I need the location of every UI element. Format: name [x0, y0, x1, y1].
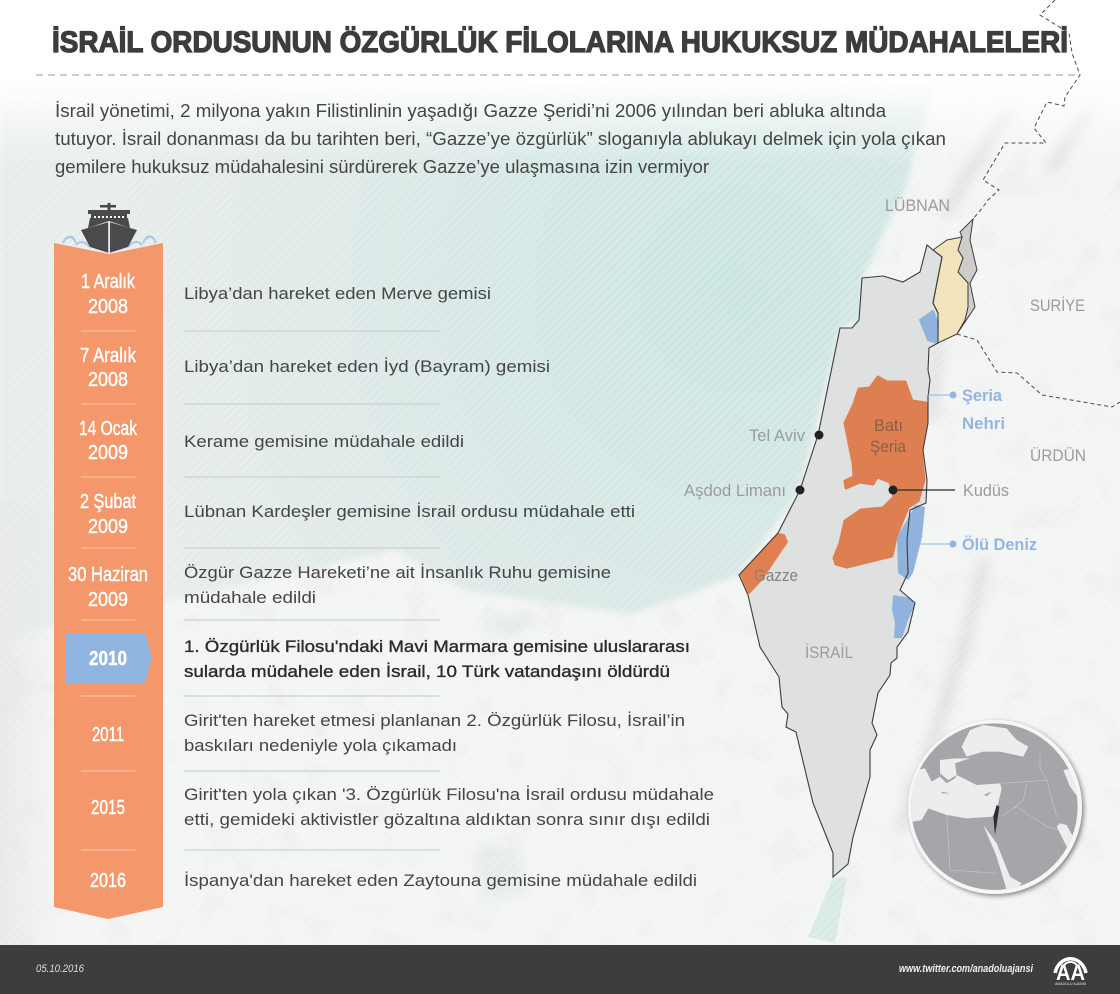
events text: müdahale edildi — [184, 588, 316, 607]
map labels: water — [920, 386, 1037, 554]
Israel territory fill — [739, 245, 942, 877]
map labels: water: Şeria — [962, 386, 1003, 405]
Israel outline — [739, 245, 942, 877]
events text: 1. Özgürlük Filosu'ndaki Mavi Marmara gemisine uluslararası — [184, 637, 690, 656]
intro text: İsrail yönetimi, 2 milyona yakın Filistinlinin yaşadığı Gazze Şeridi’ni 2006 yılından beri abluka altında — [55, 101, 887, 121]
list dividers — [184, 331, 440, 850]
dates: 2009 — [88, 589, 128, 611]
dates: 2011 — [92, 724, 124, 746]
border: Lebanon Syria dashed — [973, 0, 1080, 219]
events text: Kerame gemisine müdahale edildi — [184, 432, 464, 451]
map labels: countries: LÜBNAN — [885, 196, 950, 215]
events text: Libya’dan hareket eden Merve gemisi — [184, 284, 491, 303]
map labels: countries: ÜRDÜN — [1030, 446, 1086, 465]
map labels: cities: Gazze — [754, 566, 798, 585]
map labels: water: Ölü Deniz — [962, 535, 1037, 554]
events text: baskıları nedeniyle yola çıkamadı — [184, 736, 457, 755]
border: Syria Jordan dashed — [957, 334, 1120, 407]
timeline ribbon — [54, 203, 163, 919]
dates: 7 Aralık — [80, 345, 137, 367]
events text: Girit'ten yola çıkan '3. Özgürlük Filosu'na İsrail ordusu müdahale — [184, 785, 714, 804]
footer date: 05.10.2016 — [36, 963, 85, 975]
events text: etti, gemideki aktivistler gözaltına aldıktan sonra sınır dışı edildi — [184, 810, 710, 829]
highlighted year tag — [66, 633, 152, 683]
dates: 14 Ocak — [79, 418, 138, 440]
Gaza Strip — [741, 534, 787, 593]
map labels: cities: Kudüs — [963, 481, 1009, 500]
intro text: tutuyor. İsrail donanması da bu tarihten beri, “Gazze’ye özgürlük” sloganıyla ablukayı delmek için yola çıkan — [55, 129, 946, 149]
dates: 2009 — [88, 516, 128, 538]
dates: 2 Şubat — [80, 491, 136, 513]
dates: 2008 — [88, 369, 128, 391]
Sea of Galilee — [920, 311, 938, 343]
icon: waves — [63, 236, 156, 247]
icon: ship — [81, 203, 137, 253]
logo: Anadolu Ajansı: ANADOLU AJANSI — [1055, 981, 1086, 986]
dates: 1 Aralık — [81, 271, 136, 293]
locator globe — [907, 719, 1087, 899]
events text: Girit'ten hareket etmesi planlanan 2. Özgürlük Filosu, İsrail’in — [184, 711, 685, 730]
West Bank — [834, 377, 926, 567]
footer link: www.twitter.com/anadoluajansi — [899, 963, 1034, 975]
Dead Sea — [897, 505, 925, 580]
dates: 2008 — [88, 296, 128, 318]
dates — [68, 271, 148, 892]
dates: 2010 — [89, 648, 127, 670]
footer bar — [0, 945, 1120, 994]
title: İSRAİL ORDUSUNUN ÖZGÜRLÜK FİLOLARINA HUKUKSUZ MÜDAHALELERİ — [52, 26, 1068, 59]
events text: Libya’dan hareket eden İyd (Bayram) gemisi — [184, 357, 550, 376]
logo: Anadolu Ajansı: AA — [1056, 960, 1085, 985]
events text: Özgür Gazze Hareketi’ne ait İnsanlık Ruhu gemisine — [184, 563, 611, 582]
map: Israel and surroundings — [739, 0, 1120, 877]
map labels: countries: SURİYE — [1030, 296, 1085, 315]
ribbon dividers — [81, 331, 136, 850]
map labels: water: Nehri — [962, 414, 1005, 433]
Golan Heights gray part — [957, 219, 977, 334]
map labels: cities — [684, 416, 1009, 585]
ribbon shape — [54, 243, 163, 919]
map labels: countries — [805, 196, 1086, 662]
events text: Lübnan Kardeşler gemisine İsrail ordusu müdahale etti — [184, 502, 635, 521]
map labels: countries: İSRAİL — [805, 643, 853, 662]
map labels: cities: Şeria — [870, 437, 906, 456]
event list — [184, 284, 714, 890]
intro text: gemilere hukuksuz müdahalesini sürdürerek Gazze’ye ulaşmasına izin vermiyor — [55, 157, 709, 177]
dates: 2009 — [88, 442, 128, 464]
events text: sularda müdahele eden İsrail, 10 Türk vatandaşını öldürdü — [184, 662, 670, 681]
events text: İspanya'dan hareket eden Zaytouna gemisine müdahale edildi — [184, 871, 697, 890]
Golan Heights beige part — [933, 237, 968, 343]
map labels: cities: Aşdod Limanı — [684, 481, 786, 500]
dates: 30 Haziran — [68, 564, 148, 586]
dates: 2015 — [91, 797, 125, 819]
events text — [184, 284, 714, 890]
map labels: cities: Batı — [874, 416, 903, 435]
map labels: cities: Tel Aviv — [749, 426, 805, 445]
dates: 2016 — [90, 870, 126, 892]
intro text — [55, 101, 946, 177]
